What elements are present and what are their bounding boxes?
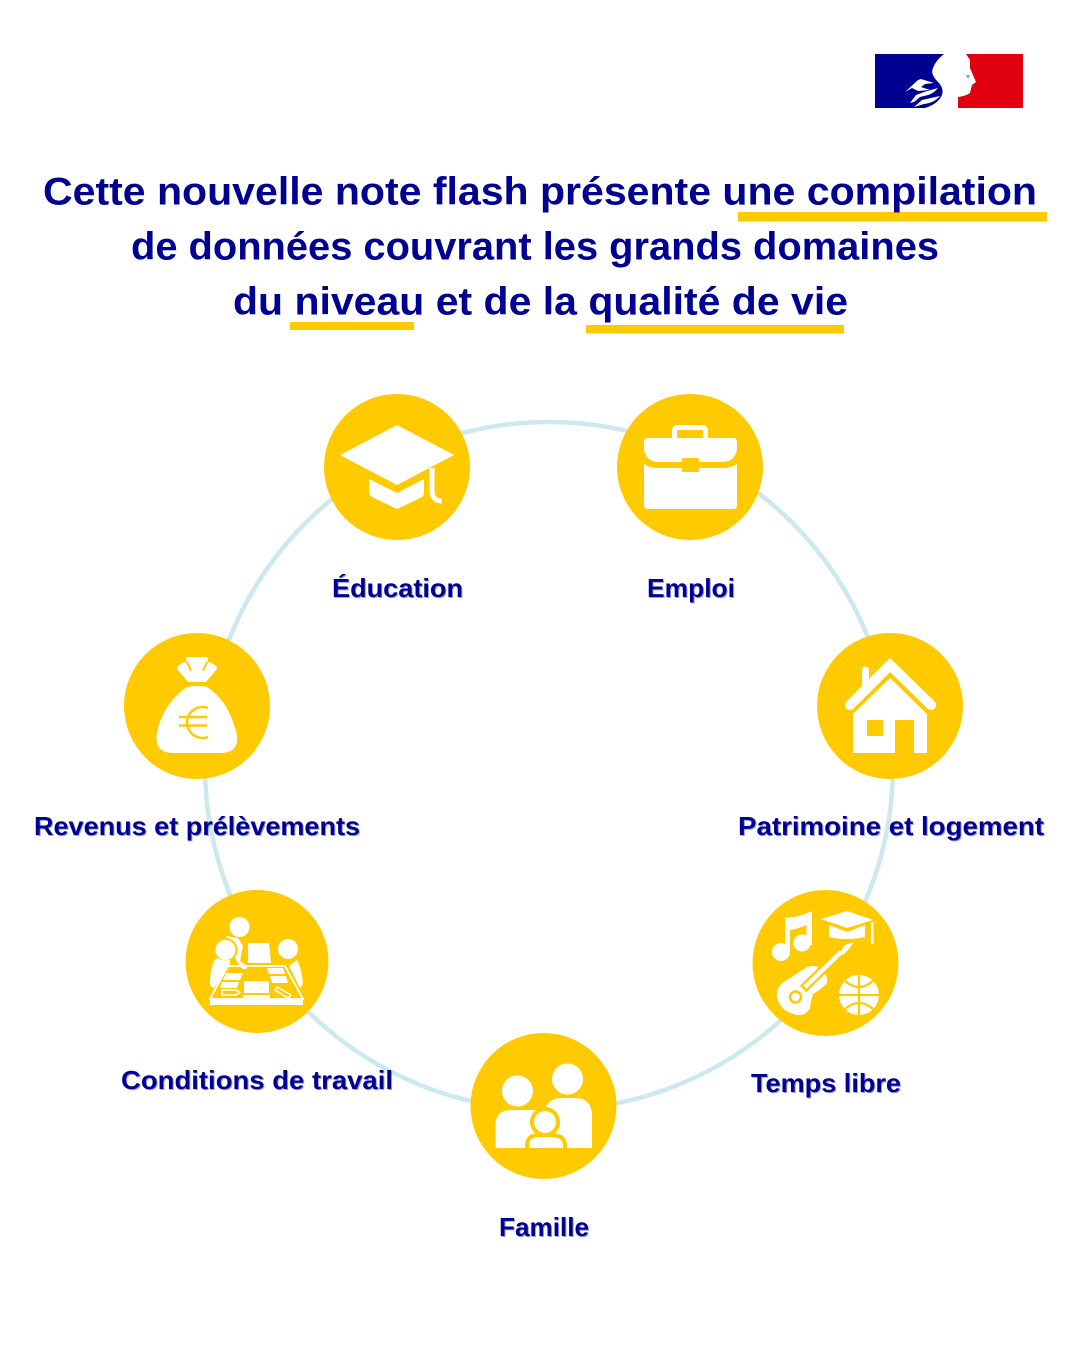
domain: Temps libre xyxy=(751,890,901,1098)
domain: Emploi xyxy=(617,394,763,603)
icon: graduation cap xyxy=(324,394,470,540)
small cap xyxy=(821,911,874,944)
heading line 2: de données couvrant les grands domaines xyxy=(131,226,939,268)
domain: Revenus et prélèvements xyxy=(34,633,360,841)
domain: Éducation xyxy=(324,394,470,603)
music note xyxy=(772,911,812,961)
heading xyxy=(43,170,1047,334)
label: Famille xyxy=(499,1212,589,1242)
domain: Patrimoine et logement xyxy=(738,633,1044,841)
basketball xyxy=(839,975,879,1015)
icon: house xyxy=(817,633,963,779)
guitar xyxy=(777,942,854,1015)
label: Revenus et prélèvements xyxy=(34,811,360,841)
ring connecting the domains xyxy=(205,422,893,1110)
logo: République française xyxy=(875,54,1023,108)
label: Éducation xyxy=(332,573,463,603)
underline: une compilation xyxy=(738,212,1047,222)
label: Emploi xyxy=(647,573,735,603)
icon: briefcase xyxy=(617,394,763,540)
underline: niveau xyxy=(290,322,414,330)
label: Patrimoine et logement xyxy=(738,811,1044,841)
icon: money bag xyxy=(124,633,270,779)
domain: Conditions de travail xyxy=(121,890,393,1095)
domain: Famille xyxy=(470,1033,616,1242)
label: Temps libre xyxy=(751,1068,901,1098)
heading line 1: Cette nouvelle note flash présente une compilation xyxy=(43,170,1037,214)
heading line 3: du niveau et de la qualité de vie xyxy=(233,280,848,324)
label: Conditions de travail xyxy=(121,1065,393,1095)
icon: leisure xyxy=(752,890,898,1036)
underline: qualité de vie xyxy=(586,325,844,334)
icon: meeting around a table xyxy=(186,890,328,1033)
icon: family xyxy=(470,1033,616,1179)
